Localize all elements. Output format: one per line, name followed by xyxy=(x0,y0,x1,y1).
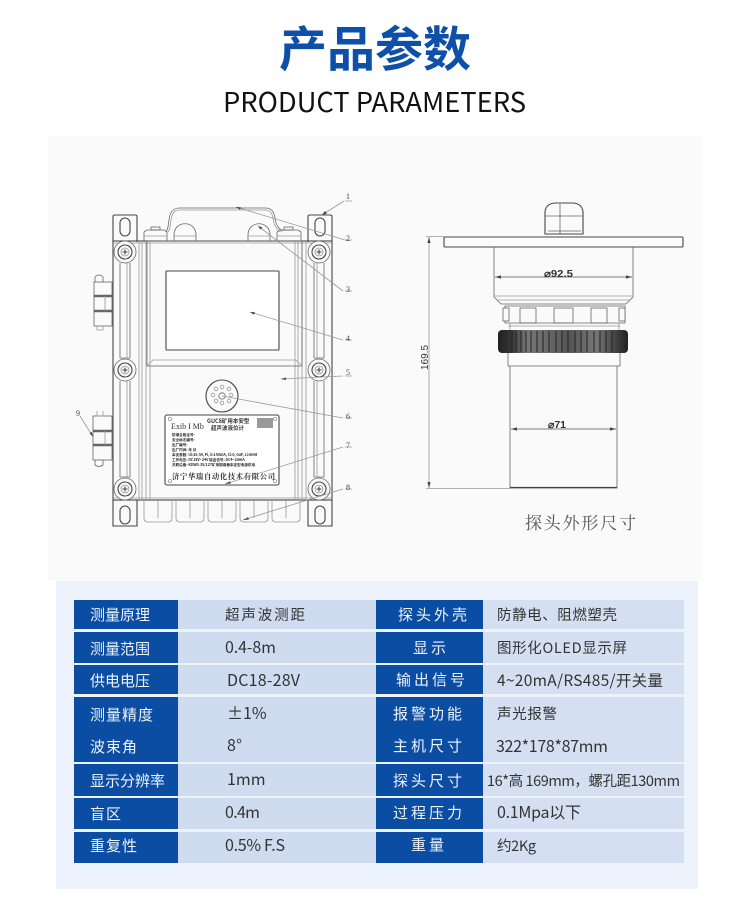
right column values: 16*高 169mm，螺孔距130mm xyxy=(487,770,680,791)
side connector upper xyxy=(94,275,112,330)
right column labels: 输出信号 xyxy=(396,669,465,690)
leader lines and callout numbers: 7 xyxy=(346,441,350,450)
dimension: 71: ⌀71 xyxy=(548,420,566,431)
right column values xyxy=(487,604,680,856)
right column values: 防静电、阻燃塑壳 xyxy=(497,604,617,625)
dimension: 169.5 xyxy=(420,236,510,488)
drawing: probe dimensions xyxy=(420,203,683,488)
top domes xyxy=(174,224,196,241)
left column labels xyxy=(90,604,165,856)
drawing: controller front view xyxy=(76,192,352,526)
left column labels: 测量范围 xyxy=(90,638,150,659)
left column labels: 重复性 xyxy=(90,835,137,856)
probe caption: 探头外形尺寸 xyxy=(525,509,636,534)
leader lines and callout numbers: 8 xyxy=(346,483,350,492)
probe upper body xyxy=(494,247,633,304)
leader lines and callout numbers: 5 xyxy=(346,368,350,377)
value cells xyxy=(178,600,684,863)
leader lines and callout numbers: 9 xyxy=(76,409,80,418)
leader lines and callout numbers xyxy=(76,192,352,520)
right column values: 声光报警 xyxy=(497,703,557,724)
probe nut xyxy=(503,306,625,330)
nameplate: 超声波液位计 xyxy=(211,424,245,432)
dimension: 92.5 xyxy=(495,269,632,280)
probe cable gland xyxy=(545,203,583,234)
left column values xyxy=(225,604,305,856)
label cells xyxy=(74,600,483,863)
right column values: 0.1Mpa以下 xyxy=(497,799,581,823)
left column values: 0.4-8m xyxy=(225,634,276,658)
right column labels: 报警功能 xyxy=(393,703,462,724)
left column values: 0.4m xyxy=(225,799,260,823)
left column values: 0.5% F.S xyxy=(225,832,285,856)
rail lines xyxy=(139,241,306,500)
probe flange xyxy=(444,237,683,247)
right column labels: 主机尺寸 xyxy=(393,735,462,756)
right column labels xyxy=(393,604,467,855)
right column values: 图形化OLED显示屏 xyxy=(497,637,627,658)
probe knurled ring xyxy=(498,330,628,353)
dimension: 169.5: 169.5 xyxy=(420,345,431,370)
nameplate: Exib I Mb xyxy=(171,422,204,431)
screen xyxy=(166,271,279,350)
cable glands xyxy=(144,501,300,522)
title: 产品参数 xyxy=(279,10,471,80)
nameplate: 出厂编号: xyxy=(172,442,188,448)
side connector lower xyxy=(93,411,112,466)
left column values: ±1% xyxy=(227,700,267,724)
panel: technical drawings xyxy=(48,136,702,580)
leader lines and callout numbers: 4 xyxy=(346,334,350,343)
left column values: DC18-28V xyxy=(227,667,301,691)
probe lower cylinder xyxy=(508,353,620,488)
nameplate: 防爆合格证号: xyxy=(172,432,195,438)
nameplate: GUC8矿用本安型 xyxy=(207,417,250,425)
speaker xyxy=(206,380,238,412)
right column values: 322*178*87mm xyxy=(496,733,608,757)
handle xyxy=(166,208,283,232)
right column labels: 探头外壳 xyxy=(398,604,467,625)
leader lines and callout numbers: 3 xyxy=(346,285,350,294)
top cable clamps xyxy=(144,230,301,241)
dimension: 92.5: ⌀92.5 xyxy=(544,269,573,280)
right column labels: 重量 xyxy=(411,834,444,855)
right column labels: 过程压力 xyxy=(393,802,462,823)
nameplate: 安全标志编号: xyxy=(172,437,195,443)
nameplate: 出厂时间: 年 月 xyxy=(172,447,197,453)
left column labels: 测量原理 xyxy=(90,604,150,625)
right column labels: 显示 xyxy=(413,637,446,658)
left column values: 1mm xyxy=(227,766,266,790)
housing xyxy=(113,241,332,500)
right column values: 4~20mA/RS485/开关量 xyxy=(497,669,663,691)
right column values: 约2Kg xyxy=(497,835,536,856)
leader lines and callout numbers: 1 xyxy=(346,192,350,201)
left column labels: 显示分辨率 xyxy=(90,770,165,791)
leader lines and callout numbers: 6 xyxy=(346,412,350,421)
left column labels: 波束角 xyxy=(90,736,137,757)
corner screws xyxy=(114,241,330,500)
screen bezel xyxy=(147,241,302,366)
nameplate: 本安参数: Ui:26.5V, Pi, Ii:150mA, Ci:0, 0uF, Li:0mH xyxy=(172,452,258,458)
mounting brackets xyxy=(113,215,137,242)
right column labels: 探头尺寸 xyxy=(393,770,462,791)
nameplate: 关联设备: KDW0.35/127矿用隔爆兼本安型电源供电 xyxy=(172,462,255,468)
dimension: 71 xyxy=(511,420,616,431)
nameplate: 济宁华瑞自动化技术有限公司 xyxy=(172,472,275,482)
nameplate xyxy=(165,415,279,485)
left column values: 8° xyxy=(227,732,242,756)
leader lines and callout numbers: 2 xyxy=(346,234,350,243)
subtitle: PRODUCT PARAMETERS xyxy=(223,81,526,120)
panel: parameters table xyxy=(56,581,698,889)
left column labels: 盲区 xyxy=(90,803,121,824)
left column labels: 供电电压 xyxy=(90,670,150,691)
left column values: 超声波测距 xyxy=(225,604,305,625)
left column labels: 测量精度 xyxy=(90,704,153,725)
nameplate: 工作电压: DC18V~24V 输出信号: DC4~20mA xyxy=(172,457,245,463)
